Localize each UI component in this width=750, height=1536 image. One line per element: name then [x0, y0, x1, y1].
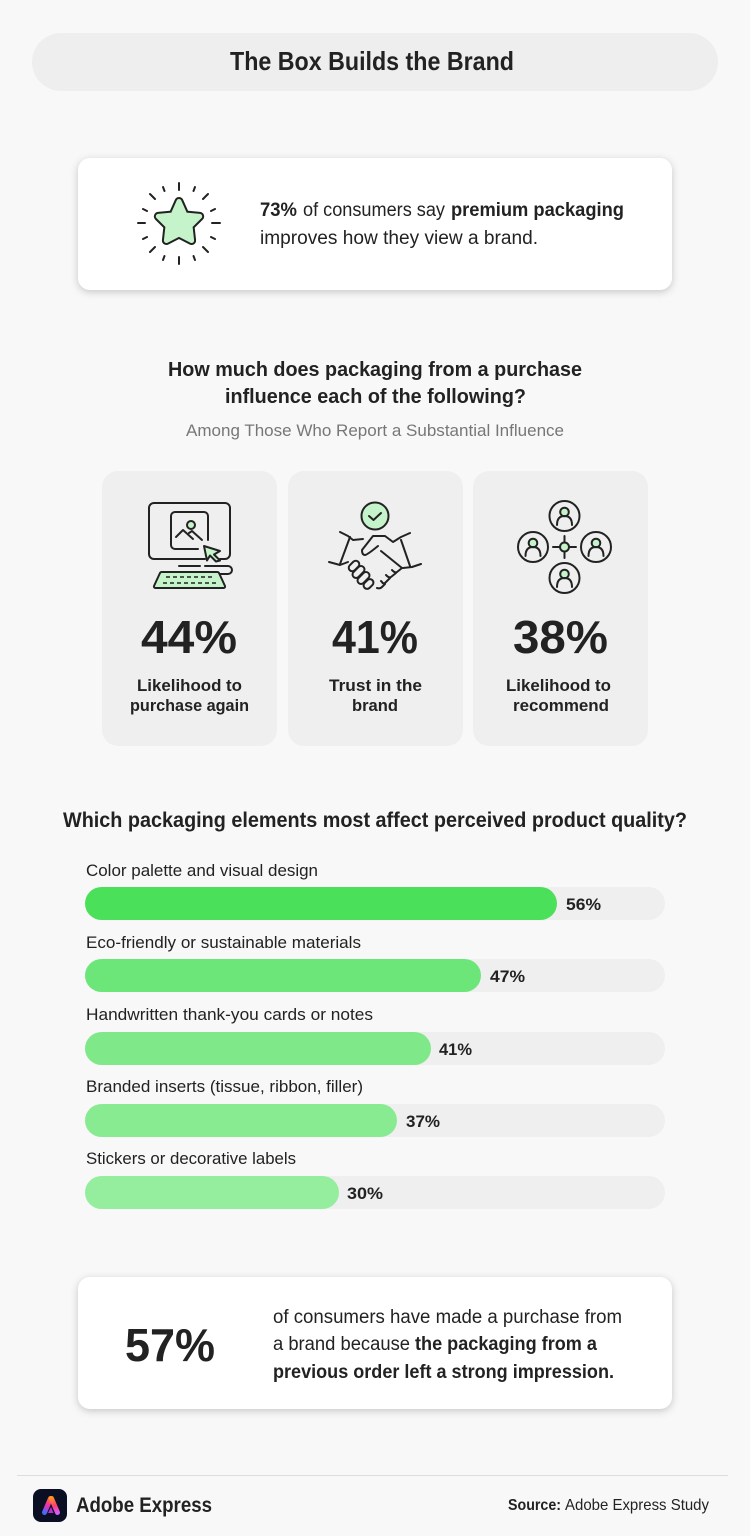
panel: purchase again: [102, 471, 277, 746]
source: Source:: [508, 1497, 561, 1514]
callout text: the packaging from a: [415, 1334, 597, 1355]
icon: star: [138, 183, 220, 264]
bar: handwritten cards 41%: Handwritten thank-you cards or notes: [86, 1005, 373, 1024]
bar: eco-friendly 47%: Eco-friendly or sustainable materials: [86, 933, 361, 952]
panel: 73% callout: [78, 158, 672, 290]
label: likelihood to purchase again: purchase again: [130, 696, 249, 715]
callout text: of consumers say: [303, 200, 445, 221]
bar: branded inserts 37%: Branded inserts (tissue, ribbon, filler): [86, 1077, 363, 1096]
stat: 38%: 38%: [513, 611, 608, 663]
heading: influence question: influence each of the following?: [225, 385, 526, 408]
bar: stickers 30%: Stickers or decorative labels: [86, 1149, 296, 1168]
icon: computer: [149, 503, 232, 588]
bar: stickers 30%: 30%: [347, 1185, 383, 1203]
label: likelihood to purchase again: [130, 676, 249, 715]
icon: handshake: [329, 502, 421, 590]
callout text: [273, 1307, 622, 1383]
heading: influence question: How much does packaging from a purchase: [168, 358, 582, 381]
title: The Box Builds the Brand: [230, 46, 514, 76]
panel: recommend: [473, 471, 648, 746]
stat: 57%: 57%: [125, 1319, 215, 1371]
bar: color palette 56%: 56%: [566, 896, 601, 914]
bar: color palette 56%: Color palette and visual design: [86, 861, 318, 880]
label: trust in the brand: [329, 676, 422, 715]
bar: eco-friendly 47%: [85, 933, 665, 992]
label: likelihood to recommend: Likelihood to: [506, 676, 611, 695]
label: likelihood to recommend: recommend: [513, 696, 609, 715]
panel: trust: [288, 471, 463, 746]
callout text: improves how they view a brand.: [260, 228, 538, 249]
bar: handwritten cards 41%: 41%: [439, 1041, 472, 1059]
callout text: previous order left a strong impression.: [273, 1362, 614, 1383]
heading: packaging elements: Which packaging elements most affect perceived product quality?: [63, 809, 687, 832]
label: likelihood to recommend: [506, 676, 611, 715]
stat: 44%: 44%: [141, 611, 237, 663]
label: trust in the brand: Trust in the: [329, 676, 422, 695]
bar: handwritten cards 41%: [85, 1005, 665, 1065]
icon: Adobe Express logo: [33, 1489, 67, 1522]
callout text: 73%: [260, 200, 297, 221]
bar: eco-friendly 47%: 47%: [490, 968, 525, 986]
bar: stickers 30%: [85, 1149, 665, 1209]
bar chart: [85, 861, 665, 1209]
stat: 41%: 41%: [332, 611, 418, 663]
title: [32, 33, 718, 91]
source: [508, 1497, 709, 1514]
bar: branded inserts 37%: [85, 1077, 665, 1137]
bar: branded inserts 37%: 37%: [406, 1113, 440, 1131]
label: likelihood to purchase again: Likelihood to: [137, 676, 242, 695]
callout text: [260, 200, 624, 249]
heading: influence question: [168, 358, 582, 440]
bar: color palette 56%: [85, 861, 665, 920]
brand name: Adobe Express: [76, 1494, 212, 1517]
panel: 57% callout: [78, 1277, 672, 1409]
source: Adobe Express Study: [565, 1497, 709, 1514]
callout text: of consumers have made a purchase from: [273, 1307, 622, 1328]
callout text: premium packaging: [451, 200, 624, 221]
label: trust in the brand: brand: [352, 696, 398, 715]
icon: people network: [518, 501, 611, 593]
heading: influence question: Among Those Who Report a Substantial Influence: [186, 421, 564, 440]
callout text: a brand because: [273, 1334, 410, 1355]
